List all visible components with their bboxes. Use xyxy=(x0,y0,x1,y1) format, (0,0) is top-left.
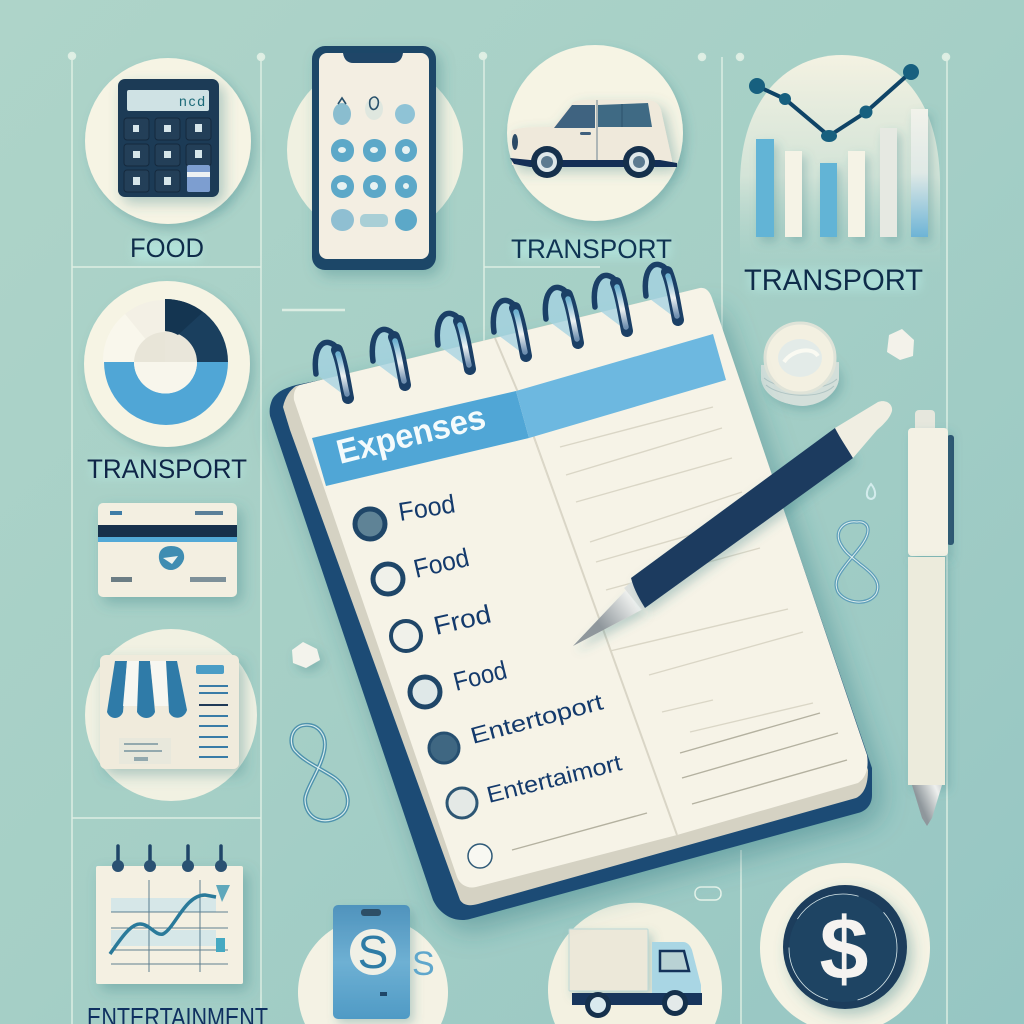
icon: standing pen right xyxy=(908,410,954,826)
page rule lines xyxy=(560,407,813,732)
panel: calculator icon: ncd xyxy=(179,93,205,109)
icon: paperclip left xyxy=(291,725,348,821)
panel: credit card icon xyxy=(98,503,237,597)
list labels: Entertoport xyxy=(468,688,606,749)
panel: truck icon xyxy=(548,903,722,1024)
icon: paper scrap top right xyxy=(887,329,914,360)
notebook cover xyxy=(270,300,872,920)
label: TRANSPORT right: TRANSPORT xyxy=(744,264,923,297)
panel: pie chart icon xyxy=(84,281,250,447)
panel: storefront icon xyxy=(85,629,257,801)
label: TRANSPORT center: TRANSPORT xyxy=(511,234,672,264)
icon: pen on notebook xyxy=(573,401,892,646)
icon: small outline pill xyxy=(695,887,721,900)
list labels xyxy=(396,488,625,808)
panel: dollar coin icon xyxy=(760,863,930,1024)
list labels: Food xyxy=(396,488,457,527)
panel: calendar line chart xyxy=(96,846,243,984)
label: FOOD: FOOD xyxy=(130,233,204,263)
label: TRANSPORT left: TRANSPORT xyxy=(87,454,247,484)
heading: Expenses: Expenses xyxy=(333,398,489,472)
panel: phone icon xyxy=(287,46,463,270)
list labels: Entertaimort xyxy=(484,749,625,808)
panel: calculator icon xyxy=(85,58,251,224)
icon: crumpled paper xyxy=(292,642,320,668)
panel: dollar phone icon: S xyxy=(412,945,435,983)
icon: water drop xyxy=(867,484,875,499)
panel: notebook xyxy=(270,264,872,920)
icon: paperclip right xyxy=(836,522,878,602)
panel: car icon xyxy=(507,45,683,221)
panel: dollar phone icon: S xyxy=(358,926,388,978)
panel: dollar coin icon: $ xyxy=(820,899,868,998)
panel: dollar phone icon xyxy=(298,905,448,1024)
list labels: Food xyxy=(411,542,472,584)
blue header band right xyxy=(516,334,726,438)
spiral rings xyxy=(315,264,678,398)
notebook pages xyxy=(294,288,868,888)
list bullets xyxy=(355,509,492,868)
list labels: Frod xyxy=(431,599,494,641)
page stack edge xyxy=(283,288,868,905)
blue header band left xyxy=(312,391,529,486)
list labels: Food xyxy=(450,655,510,697)
panel: stacked coin xyxy=(761,323,839,406)
panel: bar and line chart xyxy=(740,55,940,275)
